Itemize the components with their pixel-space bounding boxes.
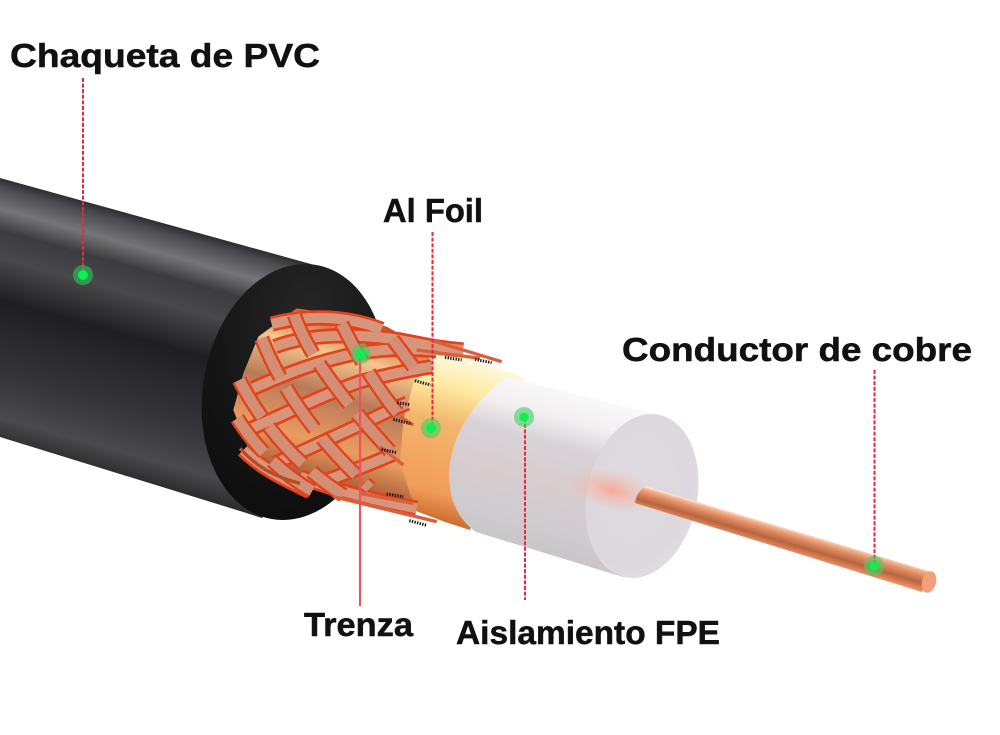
braid base: [233, 308, 433, 503]
cut strand ends: [382, 357, 492, 525]
shallow braid bands under layer: [237, 315, 502, 525]
label: Aislamiento FPE: Aislamiento FPE: [456, 614, 720, 651]
marker dots: [73, 265, 884, 576]
insulation end face: [571, 403, 713, 589]
label: Trenza: Trenza: [304, 606, 414, 643]
jacket end face: [182, 249, 406, 535]
leader lines: [83, 78, 874, 606]
loose strand tips: [240, 340, 502, 522]
aluminium foil layer: [340, 335, 525, 530]
conductor glow: [563, 460, 661, 520]
insulation cylinder body: [449, 377, 657, 577]
label: Conductor de cobre: Conductor de cobre: [622, 331, 972, 368]
copper conductor: [635, 486, 939, 594]
label: Al Foil: Al Foil: [383, 192, 483, 229]
jacket cylinder: [0, 178, 385, 518]
copper braid: [233, 308, 502, 525]
label: Chaqueta de PVC: Chaqueta de PVC: [10, 37, 320, 74]
steep braid bands: [237, 315, 413, 495]
